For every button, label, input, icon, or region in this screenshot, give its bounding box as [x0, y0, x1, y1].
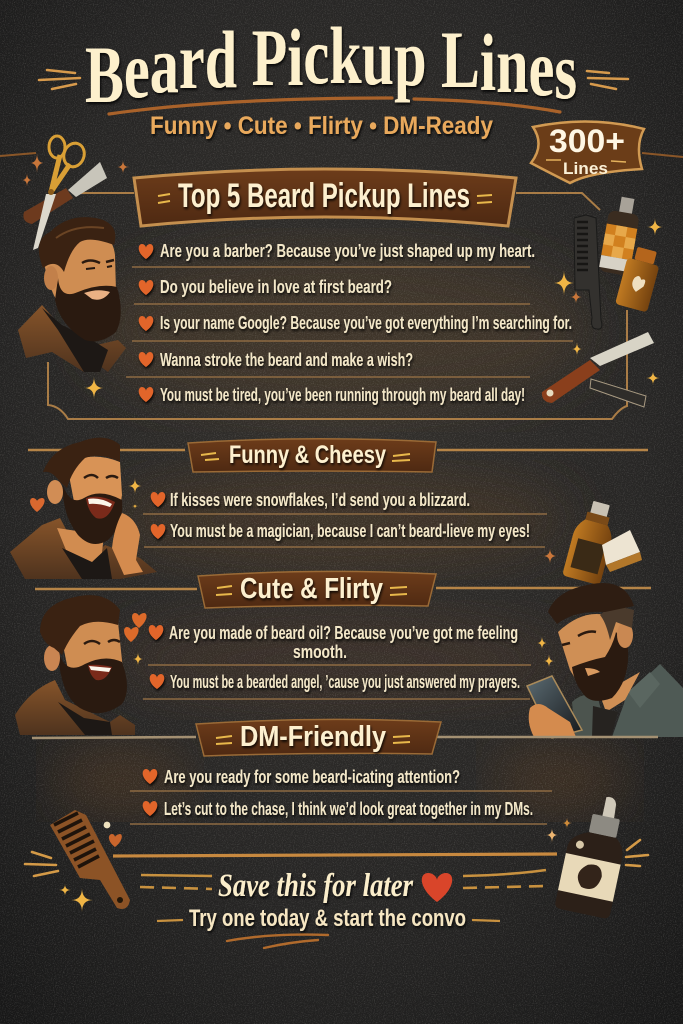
line 4	[139, 349, 413, 370]
solid flourishes	[141, 870, 546, 876]
flourish	[227, 935, 328, 948]
sparkle: cute	[133, 652, 143, 666]
subtitle: Funny • Cute • Flirty • DM-Ready	[150, 112, 493, 140]
section: cute and flirty	[35, 571, 651, 699]
banner: top 5	[134, 169, 516, 226]
icon: orange oil bottle	[615, 245, 663, 312]
line 4: Wanna stroke the beard and make a wish?	[160, 349, 413, 370]
sparkles: right	[554, 218, 663, 385]
icon: scissors	[33, 136, 88, 250]
banner: cute	[198, 571, 436, 608]
icon: dropper bottle	[554, 791, 634, 919]
banner: funny	[188, 439, 436, 472]
panel: top 5	[48, 169, 627, 419]
badge: 300+ lines	[531, 121, 644, 183]
icons: hearts cluster	[124, 613, 147, 642]
icon: black comb	[574, 215, 602, 329]
line: angel	[150, 671, 520, 692]
banner: dm: DM-Friendly	[240, 721, 386, 753]
illustration: man with phone	[527, 583, 683, 738]
line: magician	[151, 520, 530, 541]
banner rules	[32, 737, 658, 738]
line: snowflakes	[151, 489, 470, 510]
line: beard oil: Are you made of beard oil? Because you’ve got me feeling	[169, 622, 518, 643]
icon: red heart	[422, 873, 452, 902]
icon: razor	[23, 162, 107, 224]
banner: top 5: Top 5 Beard Pickup Lines	[178, 177, 470, 215]
badge: 300+ lines: 300+	[549, 123, 625, 159]
icon: amber bottle	[562, 498, 620, 585]
banner: funny: Funny & Cheesy	[229, 441, 386, 469]
cta subheading: Try one today & start the convo	[189, 905, 466, 932]
dashed flourishes	[140, 886, 545, 889]
sparkles: top left	[22, 153, 129, 187]
divider above call to action	[113, 854, 557, 856]
icon: spray bottle	[598, 195, 642, 276]
section: dm friendly	[32, 719, 658, 824]
icon: beard brush	[602, 530, 642, 572]
icon: wooden comb	[50, 810, 130, 909]
title flourishes	[39, 70, 628, 89]
sparkles: funny	[128, 478, 142, 509]
banner rules	[28, 449, 648, 451]
list: top 5 lines	[126, 240, 573, 405]
cta heading: Save this for later	[218, 868, 414, 904]
line 5	[139, 384, 525, 405]
call to action	[140, 868, 546, 948]
line: snowflakes: If kisses were snowflakes, I’d send you a blizzard.	[170, 489, 470, 510]
icon: straight razor	[542, 332, 654, 407]
line: beard oil	[149, 622, 518, 662]
panel frame	[48, 193, 627, 419]
line 1	[139, 240, 535, 261]
line: beard-icating: Are you ready for some beard-icating attention?	[164, 766, 460, 787]
sparkles: phone man	[537, 636, 554, 668]
banner: cute: Cute & Flirty	[240, 573, 383, 605]
banner rules	[35, 588, 651, 589]
comb decorations	[25, 822, 122, 912]
side rules	[0, 153, 683, 157]
title block	[39, 10, 628, 140]
title: Beard Pickup Lines	[85, 10, 577, 120]
badge: 300+ lines: Lines	[563, 159, 608, 178]
title underline	[109, 98, 560, 114]
sparkle: copper	[543, 548, 557, 564]
illustration: bearded man top	[18, 217, 126, 372]
line: beard-icating	[143, 766, 460, 787]
line: cut to the chase	[143, 798, 533, 819]
icon: heart left	[30, 498, 45, 512]
section: funny and cheesy	[28, 439, 648, 547]
line: beard oil: smooth.	[293, 641, 347, 662]
illustration: winking man	[15, 595, 135, 735]
illustration: laughing man	[10, 438, 157, 579]
banner: dm	[196, 719, 441, 756]
line 1: Are you a barber? Because you’ve just shaped up my heart.	[160, 240, 535, 261]
line 2	[139, 276, 392, 297]
sparkle: gold below man	[84, 377, 104, 399]
bottle decorations	[546, 818, 648, 866]
line 2: Do you believe in love at first beard?	[160, 276, 392, 297]
